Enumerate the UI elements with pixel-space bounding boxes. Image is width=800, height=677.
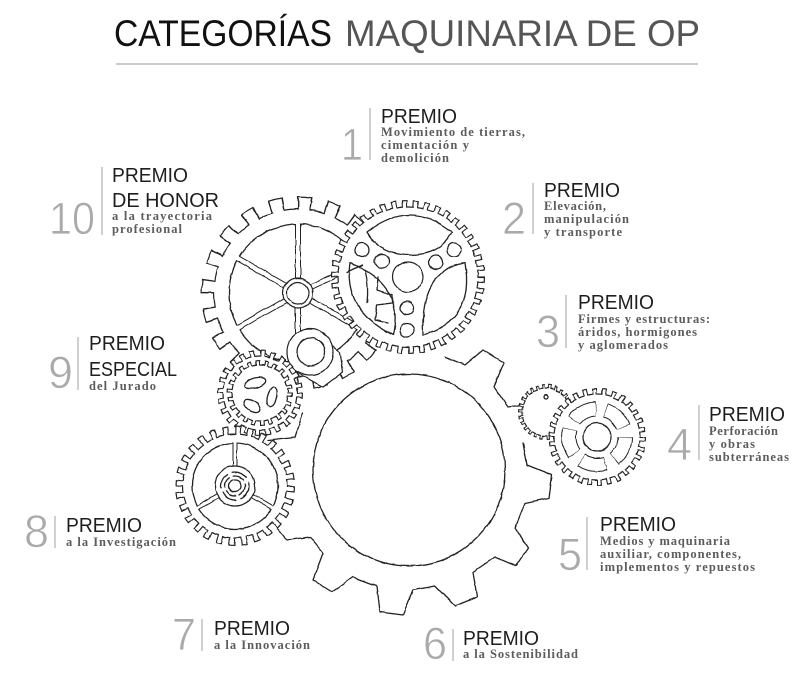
award 8: a la Investigación (66, 535, 176, 549)
award 5: 5 (558, 529, 582, 580)
award 2: PREMIO (544, 180, 620, 202)
award 1 (341, 106, 525, 170)
award 3: Firmes y estructuras: (578, 312, 710, 326)
award 2: manipulación (544, 212, 629, 226)
award 6: 6 (423, 618, 447, 669)
award 10: DE HONOR (112, 190, 219, 212)
title: MAQUINARIA DE OP (345, 13, 700, 54)
award 3: PREMIO (578, 292, 654, 314)
award 2: Elevación, (544, 199, 606, 213)
small double-ring gear (220, 353, 300, 433)
upper right gear with leaf windows (334, 204, 482, 350)
award 5: PREMIO (600, 514, 676, 536)
award 1: Movimiento de tierras, (381, 125, 525, 139)
award 5 (558, 514, 755, 580)
award 7: a la Innovación (214, 638, 310, 652)
award 1: cimentación y (381, 138, 470, 152)
award 2 (502, 180, 629, 244)
award 3: y aglomerados (578, 338, 668, 352)
award 9: 9 (48, 347, 73, 398)
gears illustration (179, 202, 643, 615)
award 5: Medios y maquinaria (600, 534, 731, 548)
award 10: 10 (49, 193, 95, 244)
award 6: a la Sostenibilidad (463, 647, 578, 661)
small right gear (520, 386, 572, 438)
award 3: 3 (536, 306, 560, 357)
award 4: Perforación (709, 424, 778, 438)
right gear with five windows (551, 391, 643, 483)
award 4: PREMIO (709, 404, 785, 426)
award 3 (536, 292, 710, 357)
award 9: ESPECIAL (89, 359, 177, 381)
award 9: PREMIO (89, 333, 165, 355)
award 1: demolición (381, 151, 449, 165)
lower left gear with three spokes (179, 430, 291, 542)
award 2: y transporte (544, 225, 622, 239)
award 7: PREMIO (214, 618, 290, 640)
award 8: PREMIO (66, 515, 142, 537)
award 10: PREMIO (112, 165, 188, 187)
award 5: implementos y repuestos (600, 560, 755, 574)
award 6: PREMIO (463, 628, 539, 650)
award 9: del Jurado (89, 379, 156, 393)
award 4: subterráneas (709, 450, 789, 464)
award 10: a la trayectoria (112, 209, 213, 223)
award 2: 2 (502, 193, 526, 244)
award 1: PREMIO (381, 106, 457, 128)
award 8: 8 (24, 506, 49, 557)
award 4 (667, 404, 789, 470)
award 7 (172, 609, 310, 660)
award 9 (48, 333, 177, 398)
award 7: 7 (172, 609, 196, 660)
large central gear (268, 350, 552, 615)
award 10: profesional (112, 222, 183, 236)
award 3: áridos, hormigones (578, 325, 697, 339)
title (114, 13, 700, 54)
award 4: y obras (709, 437, 755, 451)
award 6 (423, 618, 578, 669)
upper left gear with six spokes (208, 202, 388, 384)
award 5: auxiliar, componentes, (600, 547, 741, 561)
award 10 (49, 165, 219, 244)
award 1: 1 (341, 119, 363, 170)
award 8 (24, 506, 176, 557)
award 4: 4 (667, 419, 692, 470)
title: CATEGORÍAS (114, 13, 332, 54)
hex nut (287, 329, 343, 387)
